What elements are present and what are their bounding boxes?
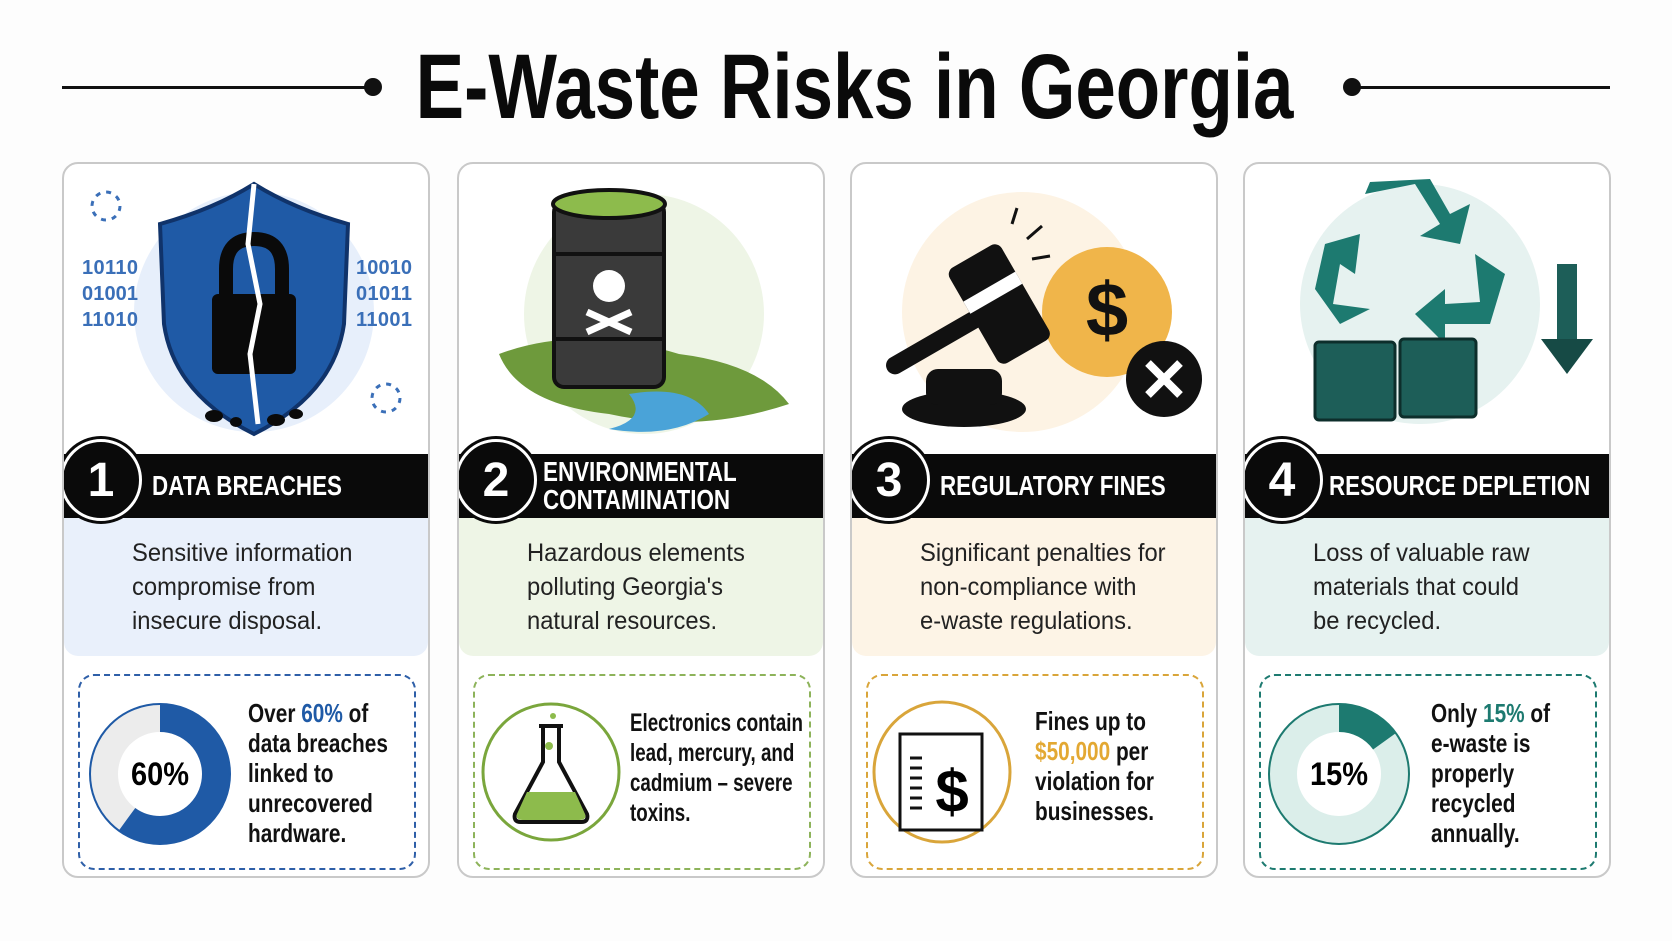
title: E-Waste Risks in Georgia <box>416 36 1293 138</box>
number badge 1: 1 <box>88 454 114 506</box>
number badge 3 <box>848 439 930 521</box>
stat box: businesses. <box>1035 796 1154 826</box>
description: materials that could <box>1313 573 1519 601</box>
number badge 1 <box>60 439 142 521</box>
stat box: properly <box>1431 758 1514 788</box>
icon: invoice dollar <box>872 700 1012 844</box>
stat box <box>866 674 1204 870</box>
stat box: recycled <box>1431 788 1515 818</box>
stat box: Fines up to <box>1035 706 1146 736</box>
number badge 2: 2 <box>483 454 509 506</box>
description: insecure disposal. <box>132 607 322 635</box>
description: Significant penalties for <box>920 539 1166 567</box>
heading: RESOURCE DEPLETION <box>1329 470 1590 501</box>
heading: REGULATORY FINES <box>940 470 1166 501</box>
stat box: violation for <box>1035 766 1154 796</box>
heading <box>852 454 1220 518</box>
stat box: annually. <box>1431 818 1520 848</box>
description: Sensitive information <box>132 539 352 567</box>
description <box>64 518 428 656</box>
description: non-compliance with <box>920 573 1137 601</box>
stat box: hardware. <box>248 818 346 848</box>
donut chart 15%: 15% <box>1310 756 1368 792</box>
number badge 3: 3 <box>876 454 902 506</box>
heading: DATA BREACHES <box>152 470 342 501</box>
number badge 2 <box>455 439 537 521</box>
stat box: e-waste is <box>1431 728 1530 758</box>
stat box: toxins. <box>630 799 690 827</box>
icon: invoice dollar: $ <box>935 758 969 825</box>
stat box: Electronics contain <box>630 709 803 737</box>
donut chart 60% <box>89 703 231 845</box>
description: be recycled. <box>1313 607 1441 635</box>
description <box>459 518 823 656</box>
stat box <box>473 674 811 870</box>
description: Hazardous elements <box>527 539 745 567</box>
stat box: data breaches <box>248 728 388 758</box>
stat box: Over 60% of <box>248 698 368 728</box>
icon: broken shield lock: 10010 <box>356 257 412 279</box>
icon: broken shield lock <box>82 182 412 436</box>
panel: environmental contamination <box>457 162 825 878</box>
description <box>852 518 1216 656</box>
description <box>1245 518 1609 656</box>
panel: regulatory fines <box>850 162 1218 878</box>
icon: broken shield lock: 11010 <box>82 309 138 331</box>
donut chart 15% <box>1268 703 1410 845</box>
description: compromise from <box>132 573 315 601</box>
icon: gavel and dollar: $ <box>1086 268 1128 353</box>
description: natural resources. <box>527 607 717 635</box>
stat box <box>1259 674 1597 870</box>
icon: broken shield lock: 10110 <box>82 257 138 279</box>
icon: broken shield lock: 11001 <box>356 309 412 331</box>
heading <box>1245 454 1613 518</box>
icon: broken shield lock: 01011 <box>356 283 412 305</box>
heading <box>64 454 432 518</box>
icon: gavel and dollar <box>886 192 1202 432</box>
stat box <box>78 674 416 870</box>
number badge 4 <box>1241 439 1323 521</box>
panel: resource depletion <box>1243 162 1611 878</box>
stat box: $50,000 per <box>1035 736 1148 766</box>
stat box: unrecovered <box>248 788 373 818</box>
heading <box>459 454 827 518</box>
icon: toxic barrel <box>499 188 789 434</box>
panel: data breaches <box>62 162 430 878</box>
icon: recycle and broken chip <box>1300 179 1593 424</box>
stat box: Only 15% of <box>1431 698 1550 728</box>
heading: CONTAMINATION <box>543 484 730 515</box>
title <box>62 36 1610 138</box>
icon: broken shield lock: 01001 <box>82 283 138 305</box>
donut chart 60%: 60% <box>131 756 189 792</box>
description: polluting Georgia's <box>527 573 723 601</box>
heading: ENVIRONMENTAL <box>543 456 737 487</box>
stat box: linked to <box>248 758 334 788</box>
number badge 4: 4 <box>1269 454 1295 506</box>
stat box: cadmium – severe <box>630 769 793 797</box>
description: Loss of valuable raw <box>1313 539 1530 567</box>
description: e-waste regulations. <box>920 607 1133 635</box>
stat box: lead, mercury, and <box>630 739 794 767</box>
icon: flask <box>482 702 620 842</box>
